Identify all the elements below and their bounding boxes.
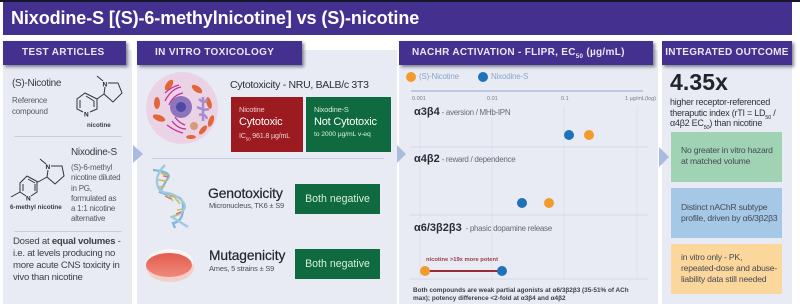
result: genotoxicity: Both negative [305,193,370,205]
text: dosing note: Dosed at equal volumes - [13,236,121,247]
card: hazard: at matched volume [681,156,750,166]
card: limitations: in vitro only - PK, [681,252,742,262]
text: nixodine description: formulated as [71,194,116,203]
text: dosing note: i.e. at levels producing no [13,248,115,259]
text: dosing note: more acute CNS toxicity in [13,260,120,271]
row: a4b2: α4β2 - reward / dependence [414,153,515,165]
grid [410,106,648,280]
card: hazard [671,132,782,182]
arrow: toxicology to nachr [397,145,406,163]
label: nicotine: nicotine [87,122,111,129]
box: nicotine cytotoxic [231,97,303,152]
text: nixodine description: a 1:1 nicotine [71,204,115,213]
text: key figure description [670,97,776,131]
heading: mutagenicity: Mutagenicity [209,248,285,263]
heading: integrated outcome [662,41,792,65]
heading: nachr activation: NACHR ACTIVATION - FLIPR, EC50 (µg/mL) [412,47,625,60]
box: nicotine cytotoxic: Nicotine [239,105,264,114]
box: nixodine not cytotoxic: Not Cytotoxic [314,116,377,128]
icon: 6-methyl nicotine structure [10,158,64,202]
text: nixodine name: Nixodine-S [71,147,117,158]
heading: cytotoxicity: Cytotoxicity - NRU, BALB/c 3T3 [230,79,369,91]
box: nixodine not cytotoxic [306,97,391,152]
icon: 6-methyl nicotine structure: N [26,196,31,202]
panel: integrated outcome [662,50,792,304]
text: dosing note: vivo than nicotine [13,272,83,283]
icon: cell [146,72,218,144]
axis labels: 0.01 [487,96,498,102]
legend: Nixodine-S [491,72,528,81]
card: hazard: No greater in vitro hazard [681,144,773,154]
text: genotoxicity method: Micronucleus, TK6 ± S9 [209,200,284,210]
panel: nachr activation [399,50,658,304]
key figure: 4.35x [670,69,728,95]
axis labels: 0.001 [412,96,426,102]
chart: EC50 dot plot [410,96,656,280]
card: limitations: repeated-dose and abuse- [681,262,777,272]
annotation: potency: nicotine >19x more potent [426,257,498,263]
icon: nicotine structure [76,76,122,118]
icon: 6-methyl nicotine structure: N [46,164,50,171]
arrow: nachr to outcome [659,147,669,167]
box: nixodine not cytotoxic: Nixodine-S [314,105,349,114]
text: nicotine name: (S)-Nicotine [12,78,61,89]
text: nixodine description: (S)-6-methyl [71,163,112,172]
heading: genotoxicity: Genotoxicity [208,185,283,201]
heading: test articles [3,41,126,65]
text: reference compound: Reference [12,96,47,105]
top dark strip [0,0,800,2]
title [3,2,792,35]
card: limitations [671,244,782,294]
legend: (S)-Nicotine [419,72,459,81]
text: nixodine description: nicotine diluted [71,173,120,182]
text: reference compound: compound [12,107,48,116]
text: key figure description: α4β2 EC50) than nicotine [670,118,762,131]
result: mutagenicity [295,249,380,279]
title: Nixodine-S [(S)-6-methylnicotine] vs (S)-nicotine [11,8,419,28]
text: nixodine description: alternative [71,214,105,223]
axis labels [412,96,656,102]
axis labels: 1 µg/mL(log) [625,96,656,102]
panel: test articles [3,50,132,304]
result: genotoxicity [295,184,380,214]
result: mutagenicity: Both negative [305,258,370,270]
text: chart note [413,287,629,302]
label: 6-methyl nicotine: 6-methyl nicotine [10,204,62,211]
box: nicotine cytotoxic: IC50 961.8 µg/mL [239,131,290,141]
text: nixodine description [71,163,120,223]
text: dosing note [13,236,121,283]
icon: nicotine structure: N [102,82,108,88]
text: mutagenicity method: Ames, 5 strains ± S9 [209,264,274,272]
icon: petri dish [146,249,194,282]
heading: integrated outcome: INTEGRATED OUTCOME [665,47,789,58]
card: subtype: profile, driven by α6/3β2β3 [681,212,777,222]
text: chart note: max); potency difference <2-fold at α3β4 and α4β2 [413,295,566,302]
text: nixodine description: in PG, [71,184,92,193]
panel: in vitro toxicology [137,50,397,304]
icon: nicotine structure: N [84,112,89,118]
legend [406,72,528,82]
heading: test articles: TEST ARTICLES [22,47,105,58]
card: subtype: Distinct nAChR subtype [681,202,767,212]
text: key figure description: higher receptor-referenced [670,97,770,107]
icon: dna helix [152,164,188,228]
box: nicotine cytotoxic: Cytotoxic [239,116,282,128]
heading: in vitro toxicology [137,41,302,65]
axis labels: 0.1 [561,96,569,102]
card: subtype [671,188,782,238]
text: reference compound [12,96,48,116]
text: key figure description: theraputic index (rTI = LD50 / [670,108,776,120]
box: nixodine not cytotoxic: to 2000 µg/mL v-eq [314,131,371,138]
row: a3b4: α3β4 - aversion / MHb-IPN [414,106,510,118]
row: a6/3b2b3: α6/3β2β3 - phasic dopamine release [414,222,552,234]
heading: in vitro toxicology: IN VITRO TOXICOLOGY [155,47,274,58]
card: limitations: liability data still needed [681,274,766,284]
text: chart note: Both compounds are weak partial agonists at α6/3β2β3 (35-51% of ACh [413,287,629,294]
heading: nachr activation [399,41,653,65]
arrow: articles to toxicology [133,145,143,163]
